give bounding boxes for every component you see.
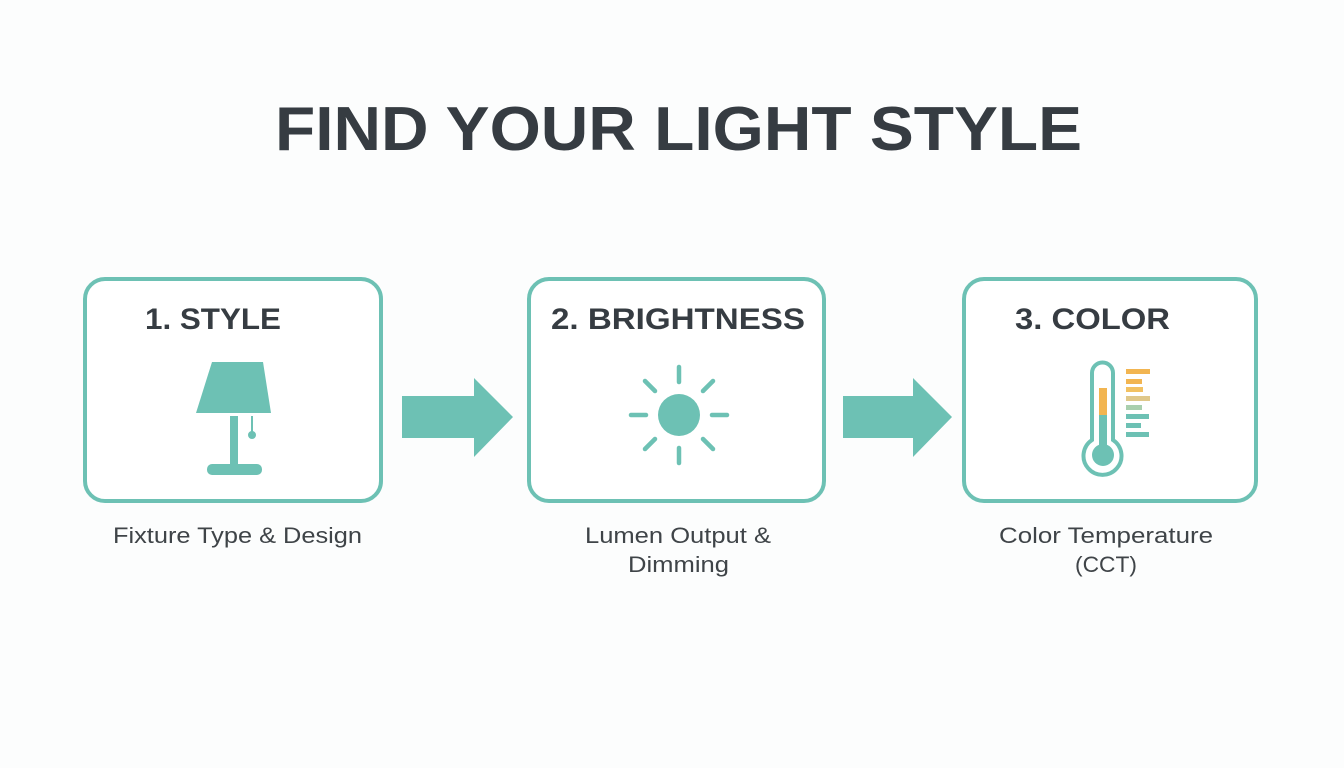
heading: style: 1. STYLE	[145, 303, 281, 336]
heading: color: 3. COLOR	[1015, 303, 1170, 336]
icon: sun	[631, 367, 727, 463]
caption: color	[999, 523, 1213, 577]
caption: brightness	[585, 523, 771, 577]
title: FIND YOUR LIGHT STYLE	[275, 95, 1082, 164]
icon: thermometer	[1084, 363, 1150, 475]
icon: lamp	[196, 362, 271, 475]
arrow 1	[402, 378, 513, 457]
arrow 2	[843, 378, 952, 457]
panel: color	[964, 279, 1256, 501]
panel: style	[85, 279, 381, 501]
heading: brightness: 2. BRIGHTNESS	[551, 303, 805, 336]
caption: color: (CCT)	[1075, 552, 1137, 577]
caption: style: Fixture Type & Design	[113, 523, 362, 548]
caption: brightness: Lumen Output &	[585, 523, 771, 548]
caption: color: Color Temperature	[999, 523, 1213, 548]
caption: brightness: Dimming	[628, 552, 729, 577]
panel: brightness	[529, 279, 824, 501]
